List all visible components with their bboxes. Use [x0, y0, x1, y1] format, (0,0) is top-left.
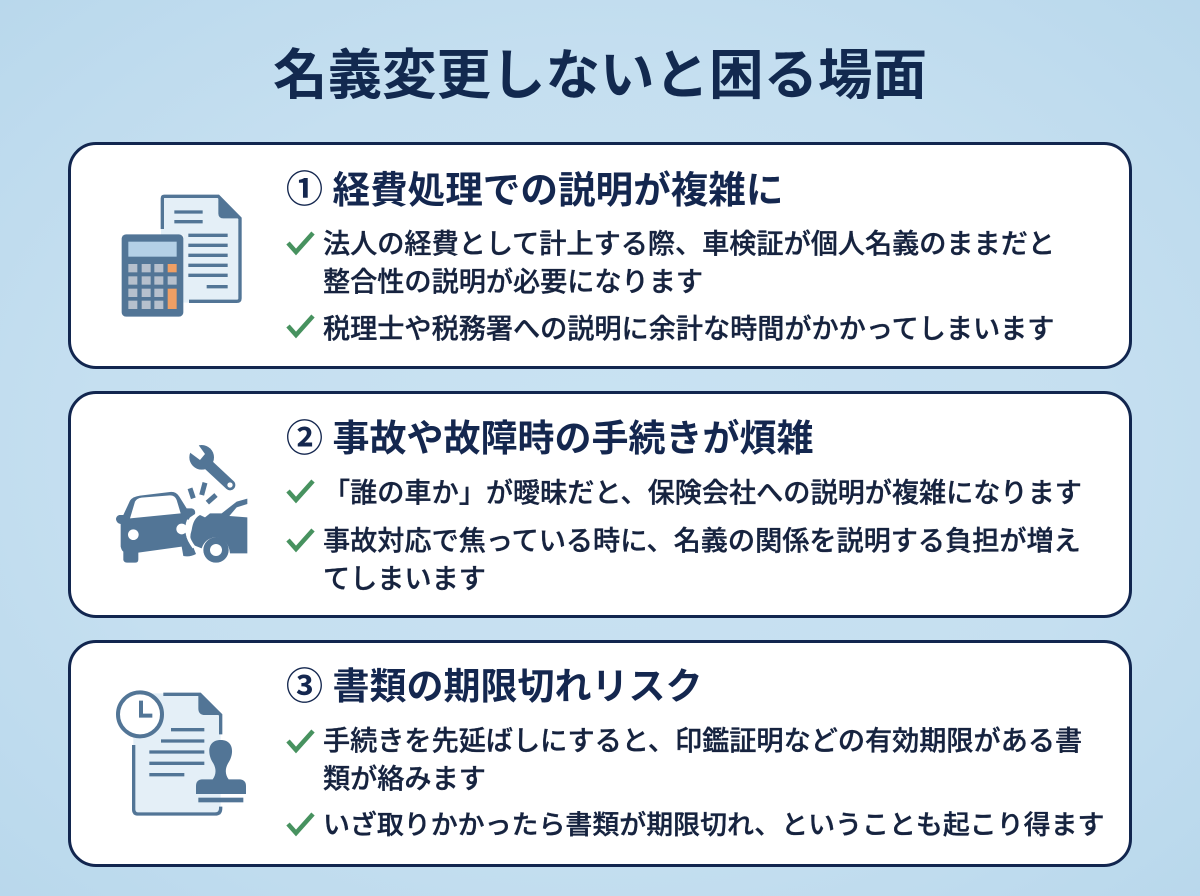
- bullet text: てしまいます: [323, 563, 486, 594]
- check mark: [286, 232, 315, 256]
- heading 2: 事故や故障時の手続きが煩雑: [332, 418, 814, 459]
- check mark: [286, 528, 315, 552]
- heading number 2: ②: [286, 418, 323, 459]
- bullet text: 「誰の車か」が曖昧だと、保険会社への説明が複雑になります: [323, 477, 1082, 508]
- bullet text: 事故対応で焦っている時に、名義の関係を説明する負担が増え: [323, 525, 1081, 556]
- panel: document expiry: [68, 640, 1132, 867]
- check mark: [286, 314, 315, 338]
- check mark: [286, 730, 315, 754]
- check mark: [286, 812, 315, 836]
- bullet text: [323, 725, 1082, 794]
- icon: calculator and document: [122, 194, 242, 317]
- bullet text: いざ取りかかったら書類が期限切れ、ということも起こり得ます: [323, 810, 1104, 840]
- panel: accident: [68, 391, 1132, 618]
- bullet text: 手続きを先延ばしにすると、印鑑証明などの有効期限がある書: [323, 725, 1082, 756]
- bullet text: 整合性の説明が必要になります: [323, 266, 703, 297]
- check mark: [286, 480, 315, 504]
- bullet text: 類が絡みます: [323, 763, 486, 794]
- icon: car crash and wrench: [116, 445, 248, 563]
- heading number 3: ③: [286, 666, 323, 707]
- bullet text: 法人の経費として計上する際、車検証が個人名義のままだと: [323, 228, 1055, 259]
- heading 3: 書類の期限切れリスク: [332, 666, 702, 707]
- bullet text: 税理士や税務署への説明に余計な時間がかかってしまいます: [323, 313, 1054, 344]
- bullet text: [323, 228, 1055, 297]
- heading 1: 経費処理での説明が複雑に: [332, 169, 783, 211]
- title: 名義変更しないと困る場面: [273, 45, 927, 106]
- panel: expense processing: [68, 142, 1132, 369]
- icon: clock, document and stamp: [116, 690, 246, 816]
- heading number 1: ①: [286, 169, 323, 210]
- bullet text: [323, 525, 1081, 594]
